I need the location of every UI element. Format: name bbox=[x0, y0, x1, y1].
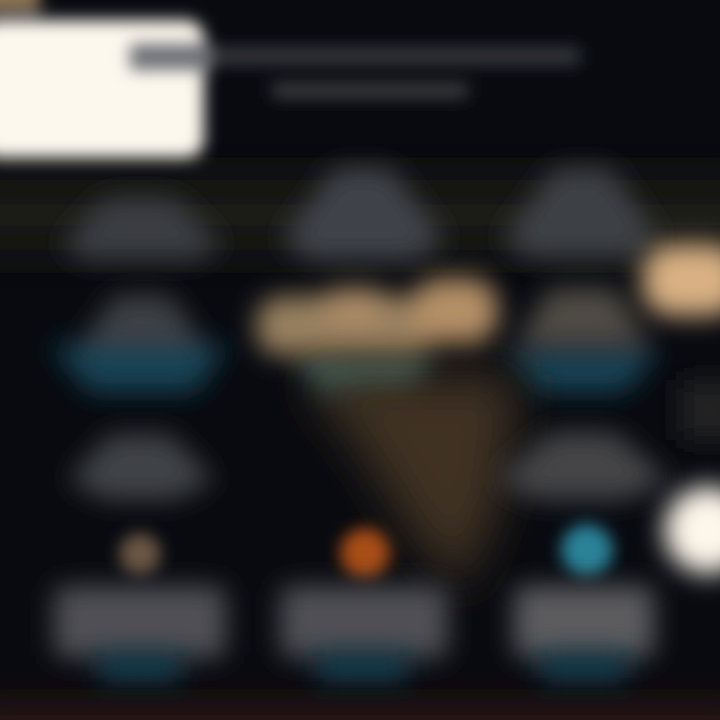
icon: blue circle bbox=[561, 524, 613, 576]
teal band: row 2 right bbox=[505, 350, 660, 392]
card: row 1 right bbox=[502, 168, 660, 258]
card: row 2 left bbox=[80, 295, 205, 345]
teal footers row 4 bbox=[98, 655, 628, 679]
teal band: row 2 center bbox=[295, 358, 435, 394]
card: row 4 left bbox=[54, 586, 226, 658]
row 1 cards bbox=[62, 168, 660, 260]
card: row 4 right bbox=[514, 586, 654, 658]
card: row 4 center bbox=[280, 586, 448, 658]
brown funnel bbox=[300, 375, 520, 590]
icon: tan circle bbox=[119, 533, 161, 575]
tan panel: center bbox=[256, 278, 498, 356]
teal band: row 2 left bbox=[50, 345, 228, 392]
header image: white glow panel bbox=[0, 0, 204, 158]
white glow: right edge bbox=[664, 486, 720, 574]
background warm band bbox=[0, 180, 720, 720]
row 3 cards bbox=[68, 432, 670, 500]
card: row 3 right bbox=[498, 432, 670, 500]
card: row 2 right bbox=[515, 288, 650, 345]
gray block: right edge bbox=[680, 380, 720, 440]
icon: orange circle bbox=[340, 528, 390, 578]
card: row 1 left bbox=[62, 198, 222, 260]
card: row 1 center bbox=[282, 168, 445, 260]
row 4 cards bbox=[54, 586, 654, 658]
tan panel: right edge bbox=[642, 244, 720, 316]
card: row 3 left bbox=[68, 434, 215, 500]
title bars bbox=[130, 44, 580, 98]
row 2 cards bbox=[50, 288, 660, 394]
